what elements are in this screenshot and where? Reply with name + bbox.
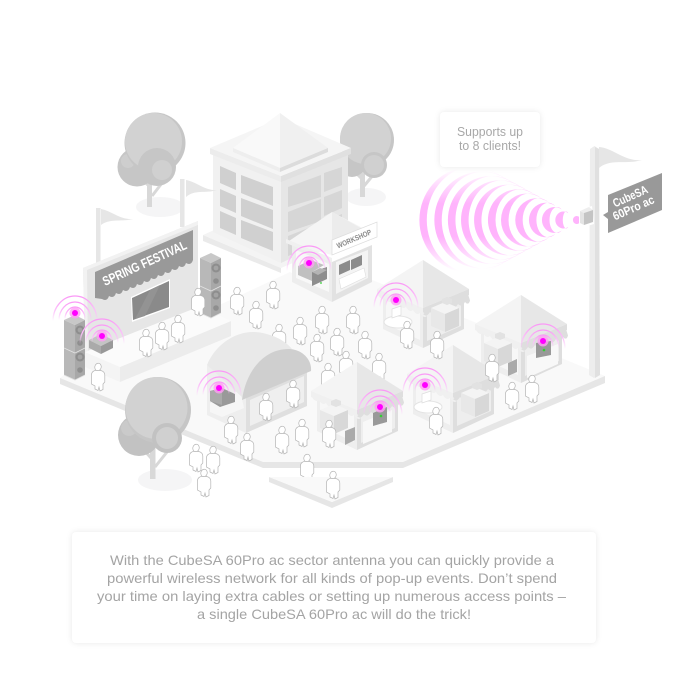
building	[203, 113, 359, 273]
stage router box	[89, 334, 113, 354]
stage	[83, 221, 231, 382]
stall centre	[311, 362, 404, 450]
speakers left stack	[64, 315, 85, 380]
workshop equipment	[298, 255, 366, 289]
stage screen	[131, 279, 170, 322]
description panel	[72, 532, 596, 643]
product label: 60Pro ac	[611, 192, 657, 223]
tree left back	[118, 112, 186, 217]
arched stall	[207, 332, 311, 433]
floor platform	[60, 272, 605, 468]
building windows	[220, 166, 342, 256]
description panel: powerful wireless network for all kinds of pop-up events. Don’t spend	[107, 570, 557, 586]
flag pole	[589, 146, 642, 378]
product label: CubeSA	[611, 182, 650, 210]
crowd in front	[190, 321, 539, 499]
stall top right	[377, 260, 470, 348]
stall lower right	[407, 345, 500, 433]
callout: supports clients: to 8 clients!	[459, 139, 521, 153]
person behind lower platform	[300, 454, 314, 482]
description panel: your time on laying extra cables or setting up numerous access points –	[97, 588, 566, 604]
banner	[95, 230, 193, 300]
tree right back	[338, 113, 394, 206]
speakers right stack	[200, 253, 221, 318]
signal beam	[419, 167, 579, 273]
lower platform	[269, 477, 393, 508]
description panel: a single CubeSA 60Pro ac will do the trick!	[197, 606, 471, 622]
stage flag left	[96, 208, 133, 263]
crowd behind stalls	[92, 281, 386, 391]
sector antenna	[578, 206, 594, 228]
flag	[599, 147, 642, 168]
description panel: With the CubeSA 60Pro ac sector antenna you can quickly provide a	[110, 552, 554, 568]
stage flag right	[180, 179, 217, 227]
workshop stall	[286, 212, 378, 302]
tree front	[118, 377, 192, 491]
banner: SPRING FESTIVAL	[100, 237, 189, 289]
callout: supports clients	[440, 112, 540, 167]
callout: supports clients: Supports up	[457, 125, 523, 139]
stall far right	[475, 295, 568, 383]
workshop sign: WORKSHOP	[335, 228, 373, 250]
product label	[603, 173, 662, 233]
wifi signals	[53, 246, 565, 415]
